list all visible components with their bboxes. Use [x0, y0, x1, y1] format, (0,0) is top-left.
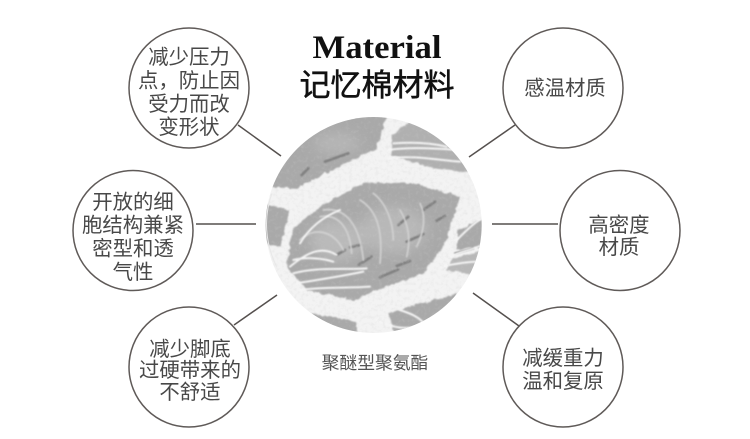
- panel: middle-right circle: [560, 170, 680, 290]
- caption: 聚醚型聚氨酯: [322, 353, 428, 373]
- connector: bottom-left: [234, 295, 277, 325]
- central foam microscope image: [266, 117, 482, 333]
- connector: top-left: [238, 125, 281, 156]
- panel: top-left circle: 减少压力: [148, 46, 230, 69]
- connector: middle-right: [492, 223, 558, 225]
- panel: top-left circle: 变形状: [158, 116, 220, 139]
- panel: top-right circle: 感温材质: [524, 77, 606, 100]
- panel: middle-left circle: 开放的细: [92, 191, 174, 214]
- panel: middle-right circle: 高密度: [588, 214, 650, 237]
- panel: bottom-right circle: [503, 307, 623, 427]
- panel: top-left circle: 点，防止因: [138, 64, 240, 94]
- panel: bottom-left circle: 不舒适: [159, 381, 221, 404]
- connector: top-right: [469, 125, 515, 157]
- panel: top-left circle: [129, 28, 249, 148]
- panel: middle-left circle: 胞结构兼紧: [82, 214, 184, 237]
- panel: bottom-right circle: 温和复原: [522, 370, 604, 393]
- panel: top-left circle: 受力而改: [148, 93, 230, 116]
- title: Material: [312, 30, 442, 66]
- connector: bottom-right: [473, 293, 519, 326]
- panel: middle-left circle: 气性: [113, 261, 153, 284]
- title: 记忆棉材料: [300, 68, 454, 103]
- panel: bottom-left circle: 过硬带来的: [139, 359, 241, 382]
- panel: bottom-left circle: [129, 307, 249, 427]
- panel: middle-left circle: 密型和透: [92, 238, 174, 260]
- panel: middle-left circle: [73, 170, 193, 290]
- title: [300, 30, 454, 103]
- panel: middle-right circle: 材质: [599, 236, 639, 259]
- thin left rim highlight: [267, 193, 277, 267]
- panel: bottom-left circle: 减少脚底: [149, 338, 231, 361]
- panel: bottom-right circle: 减缓重力: [522, 347, 604, 370]
- connector: middle-left: [196, 223, 256, 225]
- panel: top-right circle: [503, 28, 623, 148]
